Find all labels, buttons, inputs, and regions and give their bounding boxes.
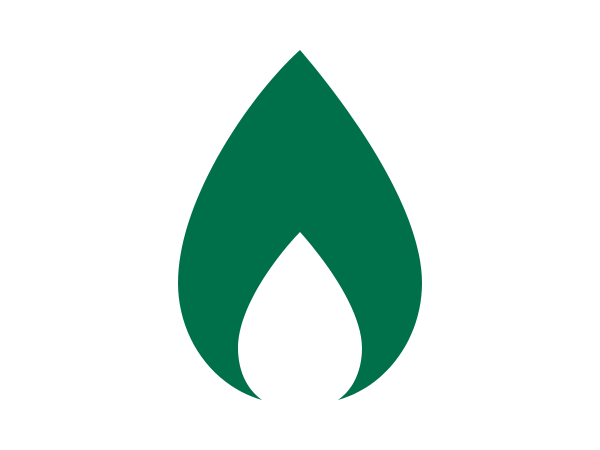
icon: green flame (178, 50, 422, 400)
